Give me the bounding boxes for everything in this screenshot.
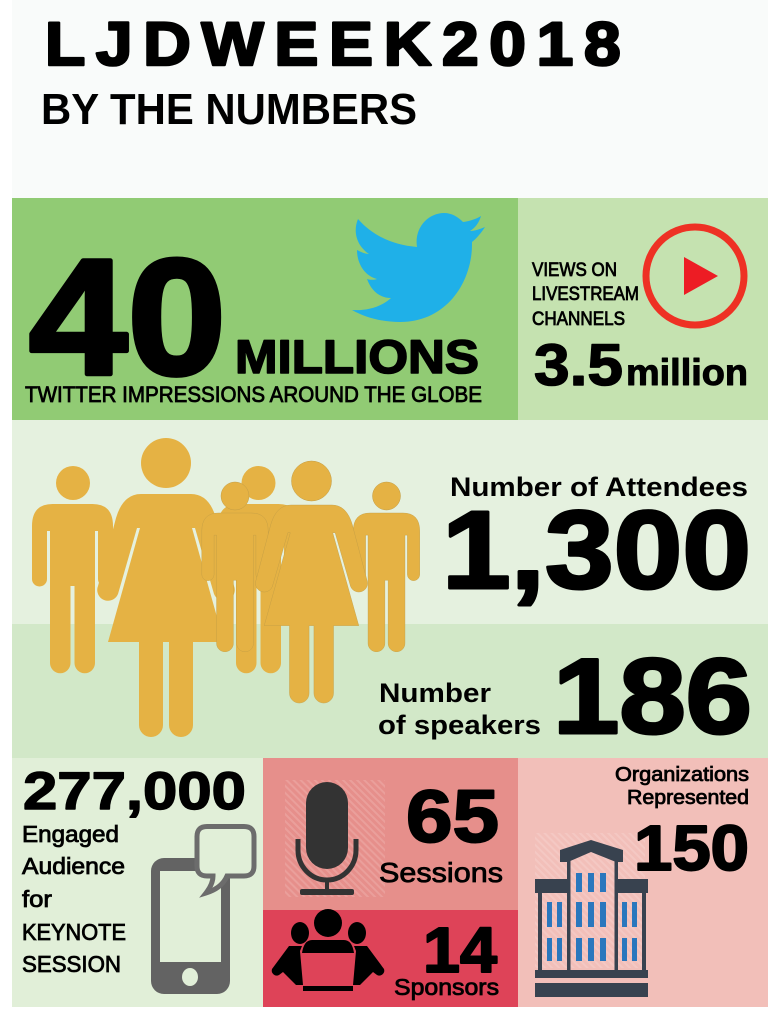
label: millions: MILLIONS <box>235 330 479 383</box>
subtitle: BY THE NUMBERS <box>41 85 417 134</box>
label: number of speakers <box>378 678 541 740</box>
figure: 1,300: 1,300 <box>442 489 751 612</box>
label: sessions: Sessions <box>379 857 503 888</box>
panel: sponsors <box>263 909 518 1007</box>
icon: twitter bird <box>352 213 485 322</box>
label: number of speakers: of speakers <box>378 710 541 740</box>
figure: 186: 186 <box>553 636 752 756</box>
figure: 277,000: 277,000 <box>23 762 246 821</box>
icon: building <box>535 840 648 997</box>
header background <box>12 0 768 198</box>
label: engaged audience for keynote session: Audience <box>22 853 125 879</box>
panel: sessions <box>263 758 518 910</box>
label: engaged audience for keynote session: Engaged <box>22 821 119 847</box>
label: engaged audience for keynote session: KEYNOTE <box>22 919 126 945</box>
figure: 14: 14 <box>423 914 497 986</box>
panel: livestream views <box>518 198 768 420</box>
label: views on livestream channels: VIEWS ON <box>532 260 617 281</box>
icon: group of people <box>32 438 420 737</box>
label: organizations represented <box>615 764 749 809</box>
label: organizations represented: Organizations <box>615 764 749 786</box>
figure: 3.5 million <box>534 333 748 398</box>
label: views on livestream channels: LIVESTREAM <box>532 284 639 305</box>
label: number of speakers: Number <box>379 678 492 708</box>
label: engaged audience for keynote session: for <box>22 886 52 912</box>
label: number of attendees: Number of Attendees <box>450 472 748 502</box>
icon: microphone <box>298 782 356 895</box>
figure: 3.5 million: 3.5 <box>534 333 623 398</box>
icon: phone with speech bubble <box>151 826 254 994</box>
figure: 3.5 million: million <box>626 352 748 393</box>
label: organizations represented: Represented <box>627 787 749 809</box>
icon: play button <box>646 227 744 325</box>
label: engaged audience for keynote session: SESSION <box>22 951 121 977</box>
title: LJDWEEK2018 <box>45 11 621 78</box>
label: views on livestream channels <box>532 260 639 330</box>
label: sponsors: Sponsors <box>394 974 499 1000</box>
panel: organizations <box>518 758 768 1007</box>
panel: speakers <box>12 624 768 758</box>
label: twitter impressions: TWITTER IMPRESSIONS AROUND THE GLOBE <box>25 382 482 407</box>
panel: attendees <box>12 420 768 624</box>
panel: engaged audience <box>12 758 263 1007</box>
figure: 40: 40 <box>29 225 226 409</box>
panel: twitter impressions <box>12 198 518 420</box>
label: engaged audience for keynote session <box>22 821 126 977</box>
label: views on livestream channels: CHANNELS <box>532 309 625 330</box>
figure: 65: 65 <box>406 775 499 858</box>
figure: 150: 150 <box>634 812 749 884</box>
icon: meeting group <box>272 909 384 991</box>
